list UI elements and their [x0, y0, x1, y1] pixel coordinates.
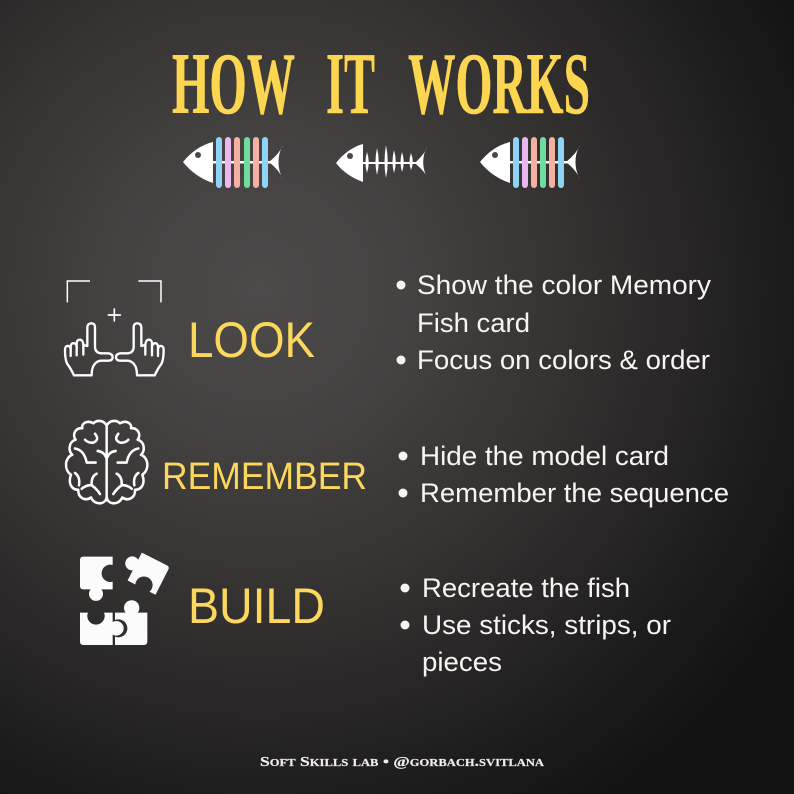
text block: remember steps — [398, 441, 729, 508]
text block: build steps — [400, 573, 671, 677]
label: LOOK: LOOK — [188, 312, 315, 368]
text block: build steps: pieces — [422, 647, 502, 677]
title: HOW — [172, 36, 295, 133]
icon: fish skeleton middle — [336, 144, 427, 182]
text block: build steps: Recreate the fish — [422, 573, 630, 603]
title: IT — [326, 36, 375, 133]
icon: hands framing — [65, 281, 164, 375]
icon: coloured fish right — [480, 137, 580, 188]
text block: look steps: Show the color Memory — [417, 270, 712, 300]
text block: look steps — [396, 270, 712, 375]
title: WORKS — [408, 36, 590, 133]
text block: remember steps: Remember the sequence — [420, 478, 729, 508]
footer credit: Soft Skills lab • @gorbach.svitlana — [260, 755, 545, 770]
title — [172, 36, 590, 133]
text block: remember steps: Hide the model card — [420, 441, 669, 471]
text block: look steps: Focus on colors & order — [417, 345, 710, 375]
text block: build steps: Use sticks, strips, or — [422, 610, 671, 640]
icon: puzzle pieces — [80, 548, 170, 645]
label: REMEMBER: REMEMBER — [162, 456, 367, 498]
text block: look steps: Fish card — [417, 308, 530, 338]
icon: brain — [66, 421, 147, 503]
icon: coloured fish left — [183, 137, 283, 188]
label: BUILD: BUILD — [188, 578, 325, 634]
